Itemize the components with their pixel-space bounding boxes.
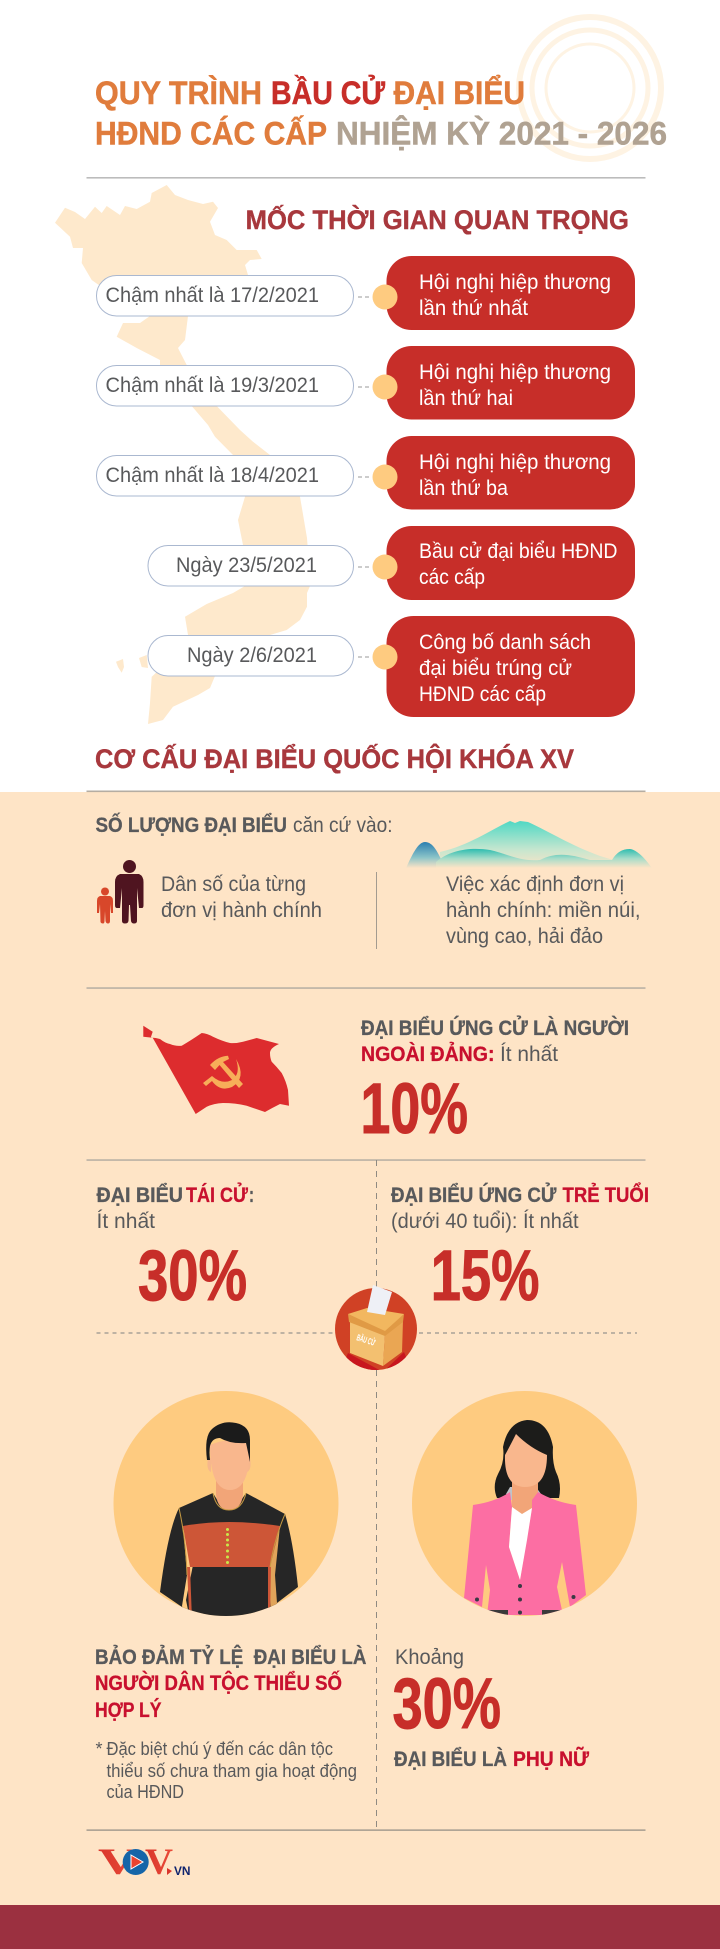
footer bar — [0, 1905, 720, 1949]
icon: ballot box: BẦU CỬ — [355, 1331, 377, 1348]
block: number of delegates — [96, 813, 392, 837]
text: young delegates: TRẺ TUỔI — [562, 1183, 649, 1207]
timeline row 4: Bầu cử đại biểu HĐND — [419, 540, 618, 563]
timeline row 4: các cấp — [419, 566, 485, 589]
icon: ballot box — [335, 1285, 417, 1372]
text: women delegates: 30% — [392, 1665, 501, 1744]
timeline row 5 — [148, 616, 635, 717]
text: non-party delegates — [360, 1016, 629, 1149]
text: population: Dân số của từng — [161, 873, 306, 896]
timeline row 5: Công bố danh sách — [419, 631, 591, 654]
heading: structure: CƠ CẤU ĐẠI BIỂU QUỐC HỘI KHÓA XV — [95, 742, 574, 774]
timeline row 2: lần thứ hai — [419, 387, 513, 410]
timeline row 2: Chậm nhất là 19/3/2021 — [106, 374, 319, 397]
map of Vietnam — [55, 185, 310, 724]
text: re-elected delegates: ĐẠI BIỂU — [96, 1184, 183, 1207]
logo: VOV.VN: VN — [174, 1864, 190, 1878]
icon: party flag — [143, 1026, 289, 1114]
text: administrative unit: vùng cao, hải đảo — [446, 925, 603, 948]
text: administrative unit — [446, 873, 640, 948]
timeline row 2: Hội nghị hiệp thương — [419, 361, 611, 384]
title: QUY TRÌNH — [95, 75, 262, 111]
text: re-elected delegates: : — [249, 1184, 254, 1207]
timeline row 5: HĐND các cấp — [419, 683, 546, 706]
text: non-party delegates: 10% — [360, 1070, 468, 1149]
timeline row 3 — [96, 436, 635, 510]
note: ethnic minorities: Đặc biệt chú ý đến các dân tộc — [106, 1739, 333, 1759]
illustration: woman — [412, 1391, 637, 1620]
timeline row 1: lần thứ nhất — [419, 297, 528, 320]
block: number of delegates: SỐ LƯỢNG ĐẠI BIỂU — [96, 813, 287, 837]
text: young delegates: 15% — [431, 1237, 540, 1316]
text: population: đơn vị hành chính — [161, 899, 322, 922]
text: ethnic minority delegates: HỢP LÝ — [95, 1698, 162, 1722]
text: young delegates — [391, 1183, 649, 1316]
timeline row 5: Ngày 2/6/2021 — [187, 644, 317, 667]
icon: adult and child — [97, 860, 144, 924]
logo: VOV.VN: V — [98, 1842, 138, 1883]
title: ĐẠI BIỂU — [394, 75, 525, 111]
timeline row 3: Chậm nhất là 18/4/2021 — [106, 464, 319, 487]
text: women delegates: Khoảng — [395, 1646, 464, 1669]
timeline row 3: lần thứ ba — [419, 477, 508, 500]
text: non-party delegates: Ít nhất — [500, 1043, 558, 1066]
text: administrative unit: hành chính: miền núi, — [446, 899, 640, 922]
text: population — [161, 873, 322, 922]
text: re-elected delegates — [96, 1183, 254, 1316]
text: re-elected delegates: Ít nhất — [96, 1210, 155, 1233]
title: BẦU CỬ — [271, 75, 385, 111]
heading: timeline: MỐC THỜI GIAN QUAN TRỌNG — [246, 203, 629, 235]
note: ethnic minorities: của HĐND — [106, 1782, 184, 1802]
text: young delegates: ĐẠI BIỂU ỨNG CỬ — [391, 1183, 557, 1207]
peach lower background — [0, 792, 720, 1905]
text: ethnic minority delegates — [95, 1645, 366, 1722]
title: NHIỆM KỲ 2021 - 2026 — [336, 116, 667, 152]
text: women delegates: PHỤ NỮ — [513, 1747, 590, 1771]
title divider — [86, 177, 646, 179]
note: ethnic minorities: thiểu số chưa tham gia hoạt động — [106, 1761, 357, 1781]
timeline row 2 — [96, 346, 635, 420]
title — [95, 75, 667, 152]
text: re-elected delegates: 30% — [138, 1237, 247, 1316]
title: HĐND CÁC CẤP — [95, 116, 327, 152]
timeline row 1: Hội nghị hiệp thương — [419, 271, 611, 294]
text: re-elected delegates: TÁI CỬ — [186, 1183, 248, 1207]
decorative rings — [519, 17, 661, 159]
text: administrative unit: Việc xác định đơn vị — [446, 873, 624, 896]
timeline row 4: Ngày 23/5/2021 — [176, 554, 317, 577]
timeline row 1 — [96, 256, 635, 330]
text: women delegates — [392, 1646, 590, 1771]
icon: mountains — [406, 821, 652, 868]
text: non-party delegates: NGOÀI ĐẢNG: — [361, 1043, 494, 1066]
logo: VOV.VN: V — [145, 1842, 173, 1883]
note: ethnic minorities: * — [96, 1739, 103, 1759]
text: ethnic minority delegates: NGƯỜI DÂN TỘC THIỂU SỐ — [95, 1671, 342, 1695]
timeline row 3: Hội nghị hiệp thương — [419, 451, 611, 474]
note: ethnic minorities — [96, 1739, 357, 1802]
structure divider — [86, 790, 646, 792]
text: young delegates: (dưới 40 tuổi): Ít nhất — [391, 1210, 579, 1233]
text: women delegates: ĐẠI BIỂU LÀ — [394, 1748, 507, 1771]
timeline row 4 — [148, 526, 635, 600]
timeline row 5: đại biểu trúng cử — [419, 657, 572, 680]
icon: hammer and sickle — [203, 1056, 243, 1089]
block: number of delegates: căn cứ vào: — [293, 814, 392, 837]
text: non-party delegates: ĐẠI BIỂU ỨNG CỬ LÀ NGƯỜI — [361, 1016, 629, 1040]
text: ethnic minority delegates: BẢO ĐẢM TỶ LỆ ĐẠI BIỂU LÀ — [95, 1645, 366, 1669]
illustration: ethnic minority man — [114, 1391, 338, 1620]
timeline row 1: Chậm nhất là 17/2/2021 — [106, 284, 319, 307]
logo: VOV.VN — [98, 1842, 190, 1883]
